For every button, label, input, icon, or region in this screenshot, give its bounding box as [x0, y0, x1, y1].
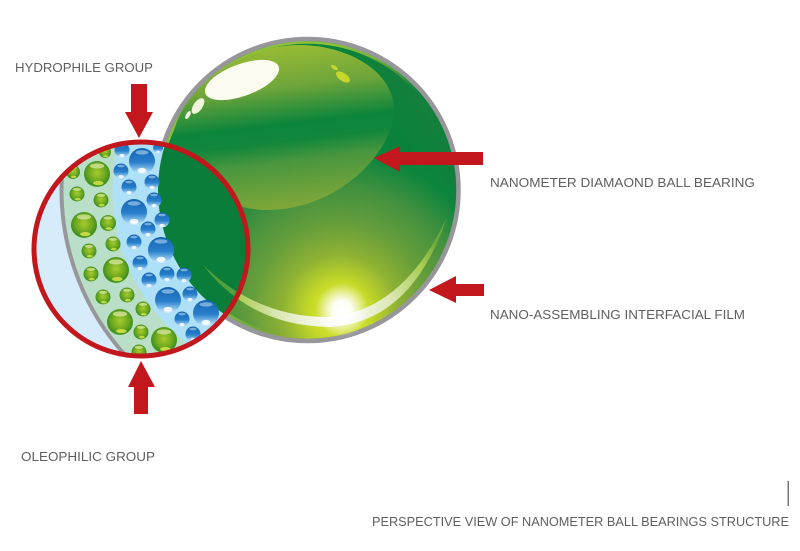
small white highlights	[184, 96, 207, 120]
ball upper right shading	[160, 42, 456, 338]
label: hydrophile group: HYDROPHILE GROUP	[15, 60, 153, 75]
arrow: interfacial film	[429, 276, 484, 303]
arrow: hydrophile group	[125, 84, 153, 138]
label: oleophilic group: OLEOPHILIC GROUP	[21, 449, 155, 464]
oleophilic band	[60, 148, 186, 354]
large white highlight	[200, 52, 284, 108]
lower crescent reflection	[203, 217, 447, 327]
bright light spot	[315, 283, 369, 337]
caption tick	[788, 481, 789, 506]
small yellow highlights	[330, 64, 352, 85]
inset red ring	[34, 142, 248, 356]
arrow: diamond ball bearing	[374, 146, 483, 172]
arrow: oleophilic group	[128, 361, 155, 414]
hydrophilic band	[112, 144, 223, 343]
blue hydrophilic balls	[114, 142, 219, 342]
label: nanometer diamond ball bearing: NANOMETER DIAMAOND BALL BEARING	[490, 175, 755, 190]
caption: PERSPECTIVE VIEW OF NANOMETER BALL BEARINGS STRUCTURE	[372, 514, 789, 529]
label: nano-assembling interfacial film: NANO-ASSEMBLING INTERFACIAL FILM	[490, 307, 745, 322]
magnified inset circle	[36, 144, 246, 354]
green oleophilic balls	[66, 146, 177, 360]
ball upper reflection lobe	[173, 45, 394, 210]
ball top rim highlight	[160, 42, 455, 338]
inset crescent	[204, 266, 236, 296]
dark ball section	[158, 147, 246, 314]
nanometer diamond ball	[156, 39, 458, 341]
